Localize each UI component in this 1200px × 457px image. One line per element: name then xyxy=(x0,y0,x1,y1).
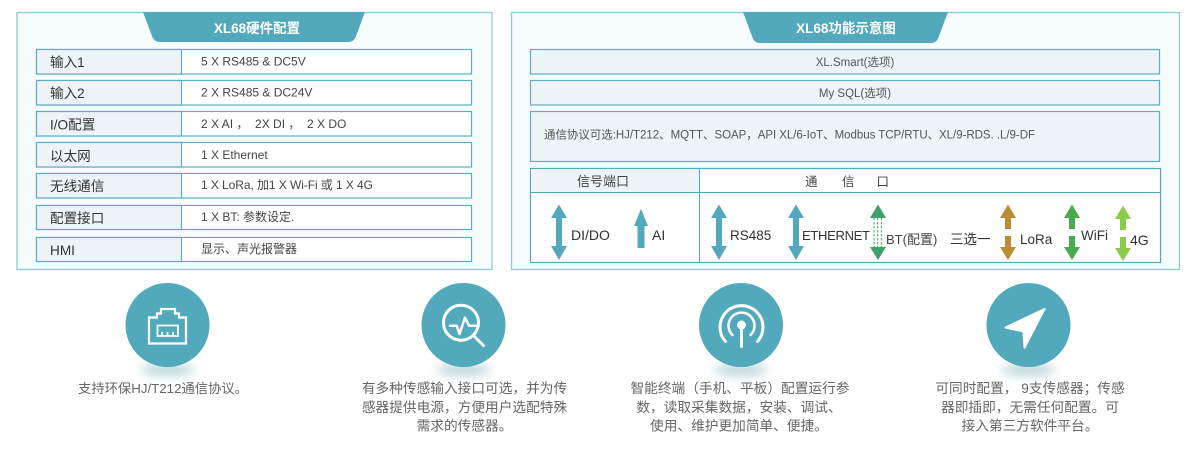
row: wireless: 1 X LoRa, 加1 X Wi-Fi 或 1 X 4G xyxy=(201,178,373,192)
icon: ethernet port xyxy=(126,283,210,367)
label: BT: BT(配置) xyxy=(886,232,937,247)
arrow: BT xyxy=(870,204,886,260)
row: ethernet xyxy=(36,142,472,167)
label: RS485: RS485 xyxy=(730,228,771,243)
row: config port: 配置接口 xyxy=(50,210,104,226)
icon: navigation pointer xyxy=(986,283,1070,367)
icon: magnifier pulse xyxy=(422,283,506,367)
bar: My SQL xyxy=(530,80,1160,105)
label: 4G: 4G xyxy=(1130,232,1149,248)
text: sensors: 感器提供电源，方便用户选配特殊 xyxy=(362,399,567,415)
row: HMI: 显示、声光报警器 xyxy=(201,241,297,256)
text: configuration: 接入第三方软件平台。 xyxy=(962,418,1098,434)
row: wireless: 无线通信 xyxy=(50,179,104,194)
bar: protocols xyxy=(530,112,1160,162)
arrow: 4G xyxy=(1115,206,1131,261)
text: protocol: 支持环保HJ/T212通信协议。 xyxy=(78,381,248,396)
arrow: Ethernet xyxy=(788,204,804,260)
row: wireless xyxy=(36,174,472,198)
row: config port: 1 X BT: 参数设定. xyxy=(201,209,294,224)
label: choose one of three: 三选一 xyxy=(950,232,990,247)
heading: hardware tab xyxy=(143,12,365,42)
row: I/O xyxy=(36,112,472,136)
label: AI: AI xyxy=(652,227,665,243)
bar: My SQL: My SQL(选项) xyxy=(819,87,891,100)
text: sensors: 需求的传感器。 xyxy=(417,418,512,434)
row: I/O: I/O配置 xyxy=(50,118,95,132)
arrow: LoRa xyxy=(1000,204,1016,260)
text: smart terminal: 数，读取采集数据，安装、调试、 xyxy=(636,400,842,415)
text: sensors: 有多种传感输入接口可选，并为传 xyxy=(362,380,567,396)
text: smart terminal: 智能终端（手机、平板）配置运行参 xyxy=(630,380,850,396)
row: HMI: HMI xyxy=(50,243,75,258)
label: WiFi: WiFi xyxy=(1081,228,1108,243)
arrow: DI/DO xyxy=(551,204,567,260)
row: input 2 xyxy=(36,80,472,105)
row: config port xyxy=(36,206,472,230)
heading: hardware tab: XL68硬件配置 xyxy=(214,21,300,36)
header: signal port: 信号端口 xyxy=(577,174,629,189)
bar: protocols: 通信协议可选:HJ/T212、MQTT、SOAP，API XL/6-IoT、Modbus TCP/RTU、XL/9-RDS. .L/9-DF xyxy=(544,128,1035,142)
row: input 2: 2 X RS485 & DC24V xyxy=(201,86,312,100)
feature: sensors xyxy=(362,283,567,434)
bar: XL.Smart: XL.Smart(选项) xyxy=(816,56,894,69)
row: input 2: 输入2 xyxy=(50,86,85,101)
label: DI/DO: DI/DO xyxy=(571,227,610,243)
row: input 1: 输入1 xyxy=(50,55,85,70)
table: ports xyxy=(530,168,1160,262)
row: HMI xyxy=(36,238,472,262)
row: ethernet: 1 X Ethernet xyxy=(201,148,268,162)
icon: signal antenna xyxy=(699,283,783,367)
row: input 1: 5 X RS485 & DC5V xyxy=(201,54,306,68)
text: configuration: 器即插即，无需任何配置。可 xyxy=(941,400,1119,415)
arrow: AI xyxy=(634,209,648,248)
heading: function tab xyxy=(743,12,948,43)
header: communication port: 通信口 xyxy=(805,175,889,189)
arrow: RS485 xyxy=(711,204,727,260)
heading: function tab: XL68功能示意图 xyxy=(796,20,896,36)
arrow: WiFi xyxy=(1064,204,1080,260)
panel: hardware configuration xyxy=(17,12,492,270)
row: input 1 xyxy=(36,50,472,74)
feature: smart terminal xyxy=(630,283,850,434)
text: smart terminal: 使用、维护更加简单、便捷。 xyxy=(650,418,828,434)
row: I/O: 2 X AI ， 2X DI ， 2 X DO xyxy=(201,117,346,131)
bar: XL.Smart xyxy=(530,50,1160,74)
row: ethernet: 以太网 xyxy=(50,149,91,164)
panel: function diagram xyxy=(512,12,1180,270)
label: LoRa: LoRa xyxy=(1020,232,1053,247)
label: Ethernet: ETHERNET xyxy=(802,228,870,243)
text: configuration: 可同时配置， 9支传感器；传感 xyxy=(935,380,1125,397)
feature: configuration xyxy=(935,283,1125,434)
feature: protocol xyxy=(78,283,248,396)
